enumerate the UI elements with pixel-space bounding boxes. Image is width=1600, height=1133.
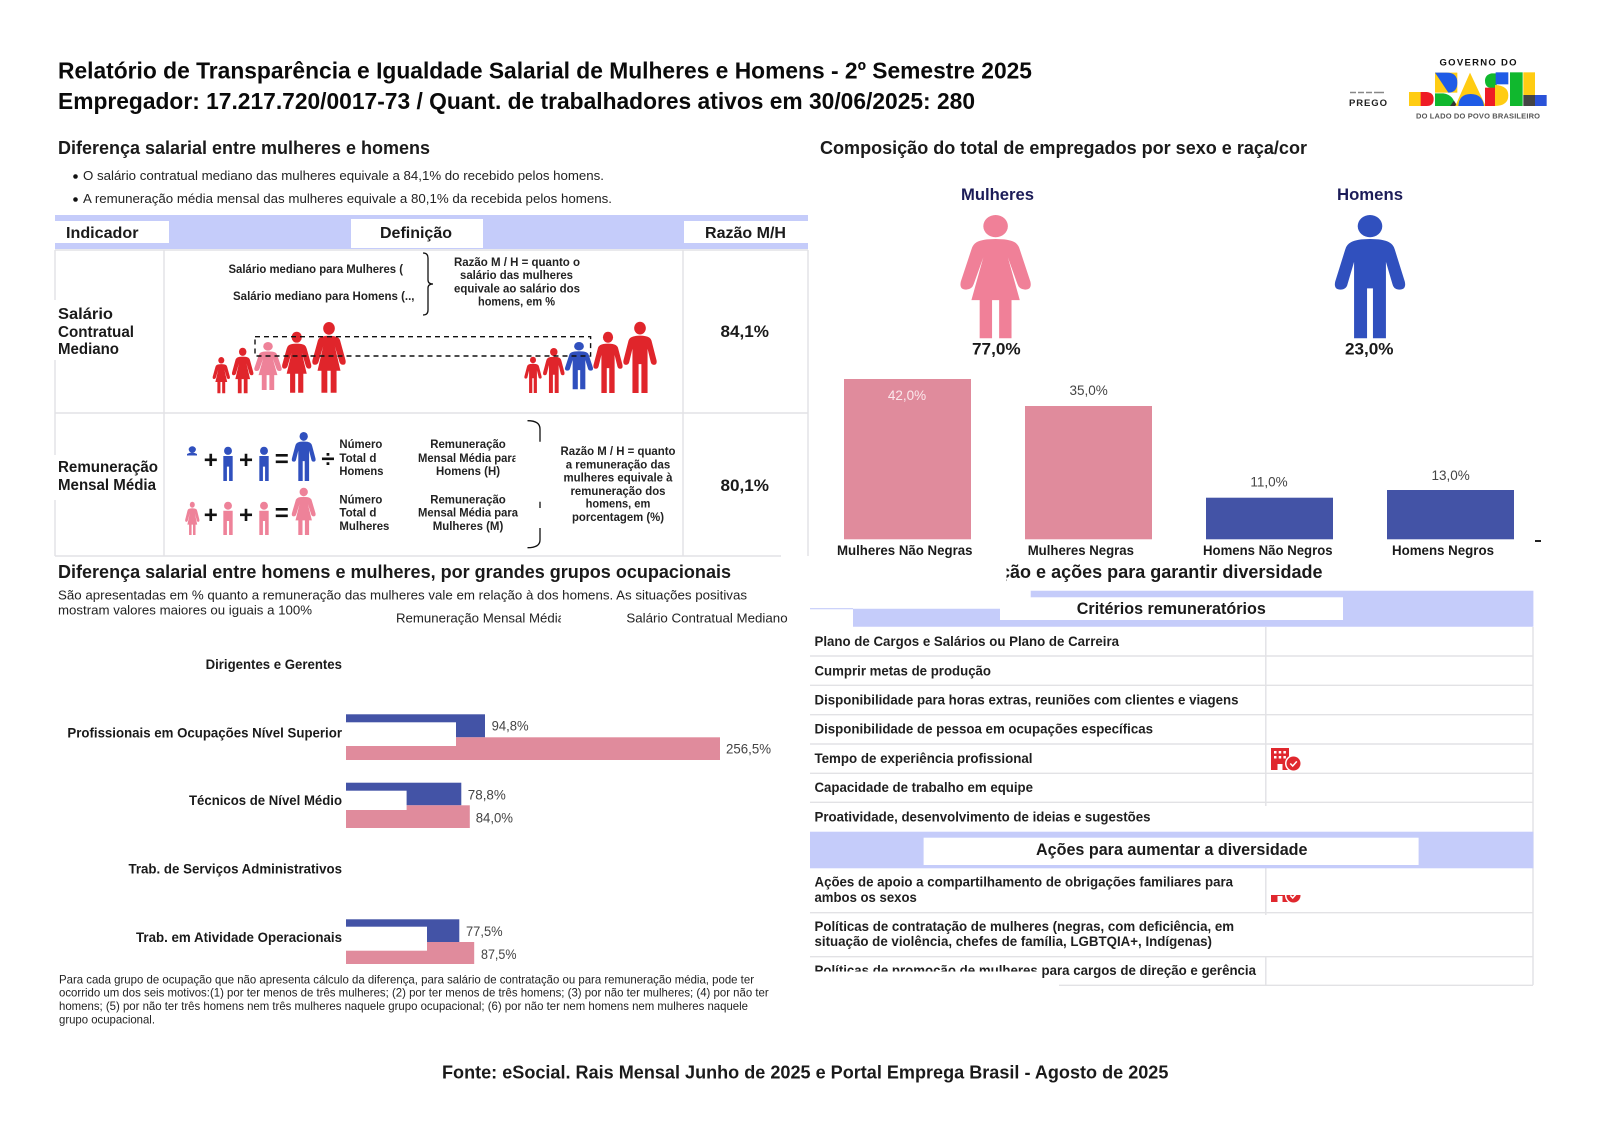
bar chart: sex and race composition: 11,0% <box>1250 475 1288 490</box>
bar chart: sex and race composition: Homens Negros <box>1392 542 1494 558</box>
category: Profissionais: 256,5% <box>726 741 771 756</box>
panel: composition by sex <box>960 185 1405 358</box>
source line: Fonte: eSocial. Rais Mensal Junho de 2025 e Portal Emprega Brasil - Agosto de 2025 <box>442 1062 1168 1082</box>
chart legend: Salário Contratual Mediano <box>626 611 788 626</box>
title <box>58 58 1032 114</box>
definition text: ratio average pay: a remuneração das <box>566 457 671 471</box>
definition text: ratio average pay: porcentagem (%) <box>572 510 664 524</box>
panel: remuneration criteria table <box>810 591 1533 985</box>
definition text: total counts: Mulheres <box>339 519 390 533</box>
bracket: average pay <box>528 421 540 548</box>
formula: men <box>187 432 335 481</box>
formula: men: = <box>275 446 289 473</box>
category: Técnicos: 84,0% <box>476 810 513 825</box>
category: Técnicos: 78,8% <box>468 787 506 802</box>
icon: employer building with check <box>1271 748 1302 772</box>
definition text: total counts: Total d <box>339 506 376 520</box>
logo: Governo do Brasil: DO LADO DO POVO BRASILEIRO <box>1416 112 1540 120</box>
actions header band <box>810 832 1533 868</box>
category: Atividade Operacionais: 77,5% <box>466 924 503 939</box>
formula: men: ÷ <box>321 446 335 473</box>
row: average monthly pay label: Remuneração <box>58 459 158 476</box>
category: Serviços Administrativos: Trab. de Serviços Administrativos <box>128 860 342 876</box>
category: Profissionais <box>67 714 771 760</box>
criteria rows <box>814 633 1239 824</box>
bar chart: sex and race composition: Homens Não Negros <box>1203 542 1333 558</box>
actions rows <box>810 874 1256 984</box>
women figure with share: Mulheres <box>961 185 1034 204</box>
definition text: total counts: Homens <box>339 464 384 478</box>
formula: women: = <box>275 500 289 527</box>
table header band: Razão M/H <box>705 225 786 242</box>
icon group: men ordered by salary <box>524 322 657 393</box>
definition text: average pay: Homens (H) <box>436 464 500 478</box>
men figure with share: 23,0% <box>1345 339 1394 358</box>
criteria rows: Proatividade, desenvolvimento de ideias e sugestões <box>814 808 1151 824</box>
table header band: Indicador <box>66 225 138 242</box>
value: 84,1%: 84,1% <box>720 322 769 341</box>
description text: mostram valores maiores ou iguais a 100% <box>58 602 312 617</box>
bar chart: sex and race composition: Mulheres Negras <box>1028 542 1134 558</box>
bullet text block: O salário contratual mediano das mulheres equivale a 84,1% do recebido pelos homens. <box>83 168 604 183</box>
actions header band: Ações para aumentar a diversidade <box>1036 841 1308 859</box>
formula: men: + <box>204 447 218 474</box>
row: average monthly pay label <box>58 459 158 494</box>
footnote: ocorrido um dos seis motivos:(1) por ter menos de três mulheres; (2) por ter menos de três homens; (3) por não ter mulheres; (4) por não ter <box>59 987 769 1000</box>
definition text: median salary: Razão M / H = quanto o <box>454 255 580 269</box>
category: Atividade Operacionais: Trab. em Atividade Operacionais <box>136 929 342 945</box>
definition text: average pay: Mensal Média para <box>418 451 518 465</box>
category: Profissionais: 94,8% <box>492 719 529 734</box>
row: contractual median salary label: Salário <box>58 306 113 323</box>
definition text: total counts: Total d <box>339 451 376 465</box>
criteria rows: Plano de Cargos e Salários ou Plano de Carreira <box>814 633 1119 649</box>
criteria rows: Capacidade de trabalho em equipe <box>814 779 1033 795</box>
definition text: average pay: Remuneração <box>430 492 506 506</box>
definition text: ratio average pay: Razão M / H = quanto <box>560 444 676 458</box>
bar chart: sex and race composition: 13,0% <box>1431 468 1470 483</box>
criteria header band: Critérios remuneratórios <box>1077 600 1266 618</box>
criteria rows: Tempo de experiência profissional <box>814 750 1032 766</box>
criteria rows: Cumprir metas de produção <box>814 662 991 678</box>
formula: men: + <box>239 447 253 474</box>
value: 80,1%: 80,1% <box>720 476 769 495</box>
definition text: average pay <box>418 437 524 533</box>
footnote: grupo ocupacional. <box>59 1013 155 1026</box>
women figure with share: 77,0% <box>972 339 1021 358</box>
definition text: total counts <box>339 437 390 533</box>
men figure with share <box>1335 185 1405 358</box>
definition text: median salary <box>228 253 580 315</box>
actions rows: Ações de apoio a compartilhamento de obrigações familiares para <box>814 874 1233 890</box>
bar chart: sex and race composition: 35,0% <box>1069 383 1108 398</box>
criteria rows: Disponibilidade de pessoa em ocupações específicas <box>814 721 1153 737</box>
women figure with share <box>960 185 1034 358</box>
actions rows: ambos os sexos <box>814 889 917 905</box>
definition text: median salary: equivale ao salário dos <box>454 282 580 296</box>
heading: criteria and diversity: ção e ações para garantir diversidade <box>1000 561 1322 582</box>
heading: composition: Composição do total de empregados por sexo e raça/cor <box>820 137 1307 158</box>
logo: Governo do Brasil: PREGO <box>1349 98 1387 109</box>
footnote: Para cada grupo de ocupação que não apresenta cálculo da diferença, para salário de contratação ou para remuneração média, pode ter <box>59 973 754 986</box>
actions rows: situação de violência, chefes de família, LGBTQIA+, Indígenas) <box>814 933 1212 949</box>
logo: Governo do Brasil <box>1349 58 1547 120</box>
definition text: total counts: Número <box>339 437 382 451</box>
row: average monthly pay label: Mensal Média <box>58 477 156 494</box>
formula: women: + <box>204 502 218 529</box>
bar chart: sex and race composition: Mulheres Não Negras <box>837 542 973 558</box>
formula: women: + <box>239 502 253 529</box>
description text: São apresentadas em % quanto a remuneração das mulheres vale em relação à dos homens. As situações positivas <box>58 587 747 602</box>
title: Empregador: 17.217.720/0017-73 / Quant. de trabalhadores ativos em 30/06/2025: 280 <box>58 88 975 114</box>
men figure with share: Homens <box>1337 185 1403 204</box>
criteria rows: Disponibilidade para horas extras, reuniões com clientes e viagens <box>814 692 1239 708</box>
definition text: median salary: salário das mulheres <box>460 268 573 282</box>
row: contractual median salary label: Mediano <box>58 341 119 358</box>
formula: women <box>185 488 316 535</box>
actions rows: Políticas de contratação de mulheres (negras, com deficiência, em <box>814 918 1234 934</box>
definition text: ratio average pay: homens, em <box>586 497 650 511</box>
bar chart: sex and race composition: 42,0% <box>888 388 926 403</box>
definition text: median salary: Salário mediano para Mulheres ( <box>228 262 403 276</box>
heading: salary difference: Diferença salarial entre mulheres e homens <box>58 137 430 158</box>
footnote <box>59 973 769 1026</box>
category: Técnicos <box>189 783 513 828</box>
definition text: median salary: homens, em % <box>478 295 555 309</box>
definition text: average pay: Mulheres (M) <box>433 519 503 533</box>
definition text: ratio average pay: mulheres equivale à <box>564 471 673 485</box>
definition text: ratio average pay: remuneração dos <box>570 484 666 498</box>
bullet text block <box>73 168 612 206</box>
definition text: average pay: Mensal Média para <box>418 506 518 520</box>
definition text: total counts: Número <box>339 492 382 506</box>
table header band <box>55 215 808 249</box>
criteria header band <box>810 591 1533 627</box>
row: contractual median salary label: Contratual <box>58 324 134 341</box>
category: Dirigentes e Gerentes: Dirigentes e Gerentes <box>206 656 342 672</box>
panel: indicators table <box>55 215 808 556</box>
definition text: average pay: Remuneração <box>430 437 506 451</box>
bullet text block: A remuneração média mensal das mulheres equivale a 80,1% da recebida pelos homens. <box>83 191 612 206</box>
chart legend <box>396 610 788 626</box>
bar chart: occupational groups <box>67 656 771 964</box>
category: Atividade Operacionais: 87,5% <box>481 947 516 962</box>
icon: clipped employer building <box>1271 895 1300 902</box>
logo: Governo do Brasil: GOVERNO DO <box>1440 58 1516 68</box>
chart legend: Remuneração Mensal Média <box>396 611 566 626</box>
icon group: women ordered by salary <box>213 322 346 393</box>
heading: occupational groups: Diferença salarial entre homens e mulheres, por grandes grupos ocupacionais <box>58 561 731 582</box>
row: contractual median salary label <box>58 306 134 358</box>
table header band: Definição <box>380 225 452 242</box>
footnote: homens; (5) por não ter três homens nem três mulheres naquele grupo ocupacional; (6) por não ter nem homens nem mulheres naquele <box>59 1000 748 1013</box>
actions rows: Políticas de promoção de mulheres para cargos de direção e gerência <box>814 962 1256 978</box>
bar chart: sex and race composition <box>837 379 1541 558</box>
category: Profissionais: Profissionais em Ocupações Nível Superior <box>67 724 343 740</box>
definition text: ratio average pay <box>560 444 676 524</box>
category: Atividade Operacionais <box>136 919 516 964</box>
definition text: median salary: Salário mediano para Homens (.., <box>233 289 414 303</box>
description text <box>58 587 747 617</box>
title: Relatório de Transparência e Igualdade Salarial de Mulheres e Homens - 2º Semestre 2025 <box>58 58 1032 84</box>
category: Técnicos: Técnicos de Nível Médio <box>189 792 342 808</box>
